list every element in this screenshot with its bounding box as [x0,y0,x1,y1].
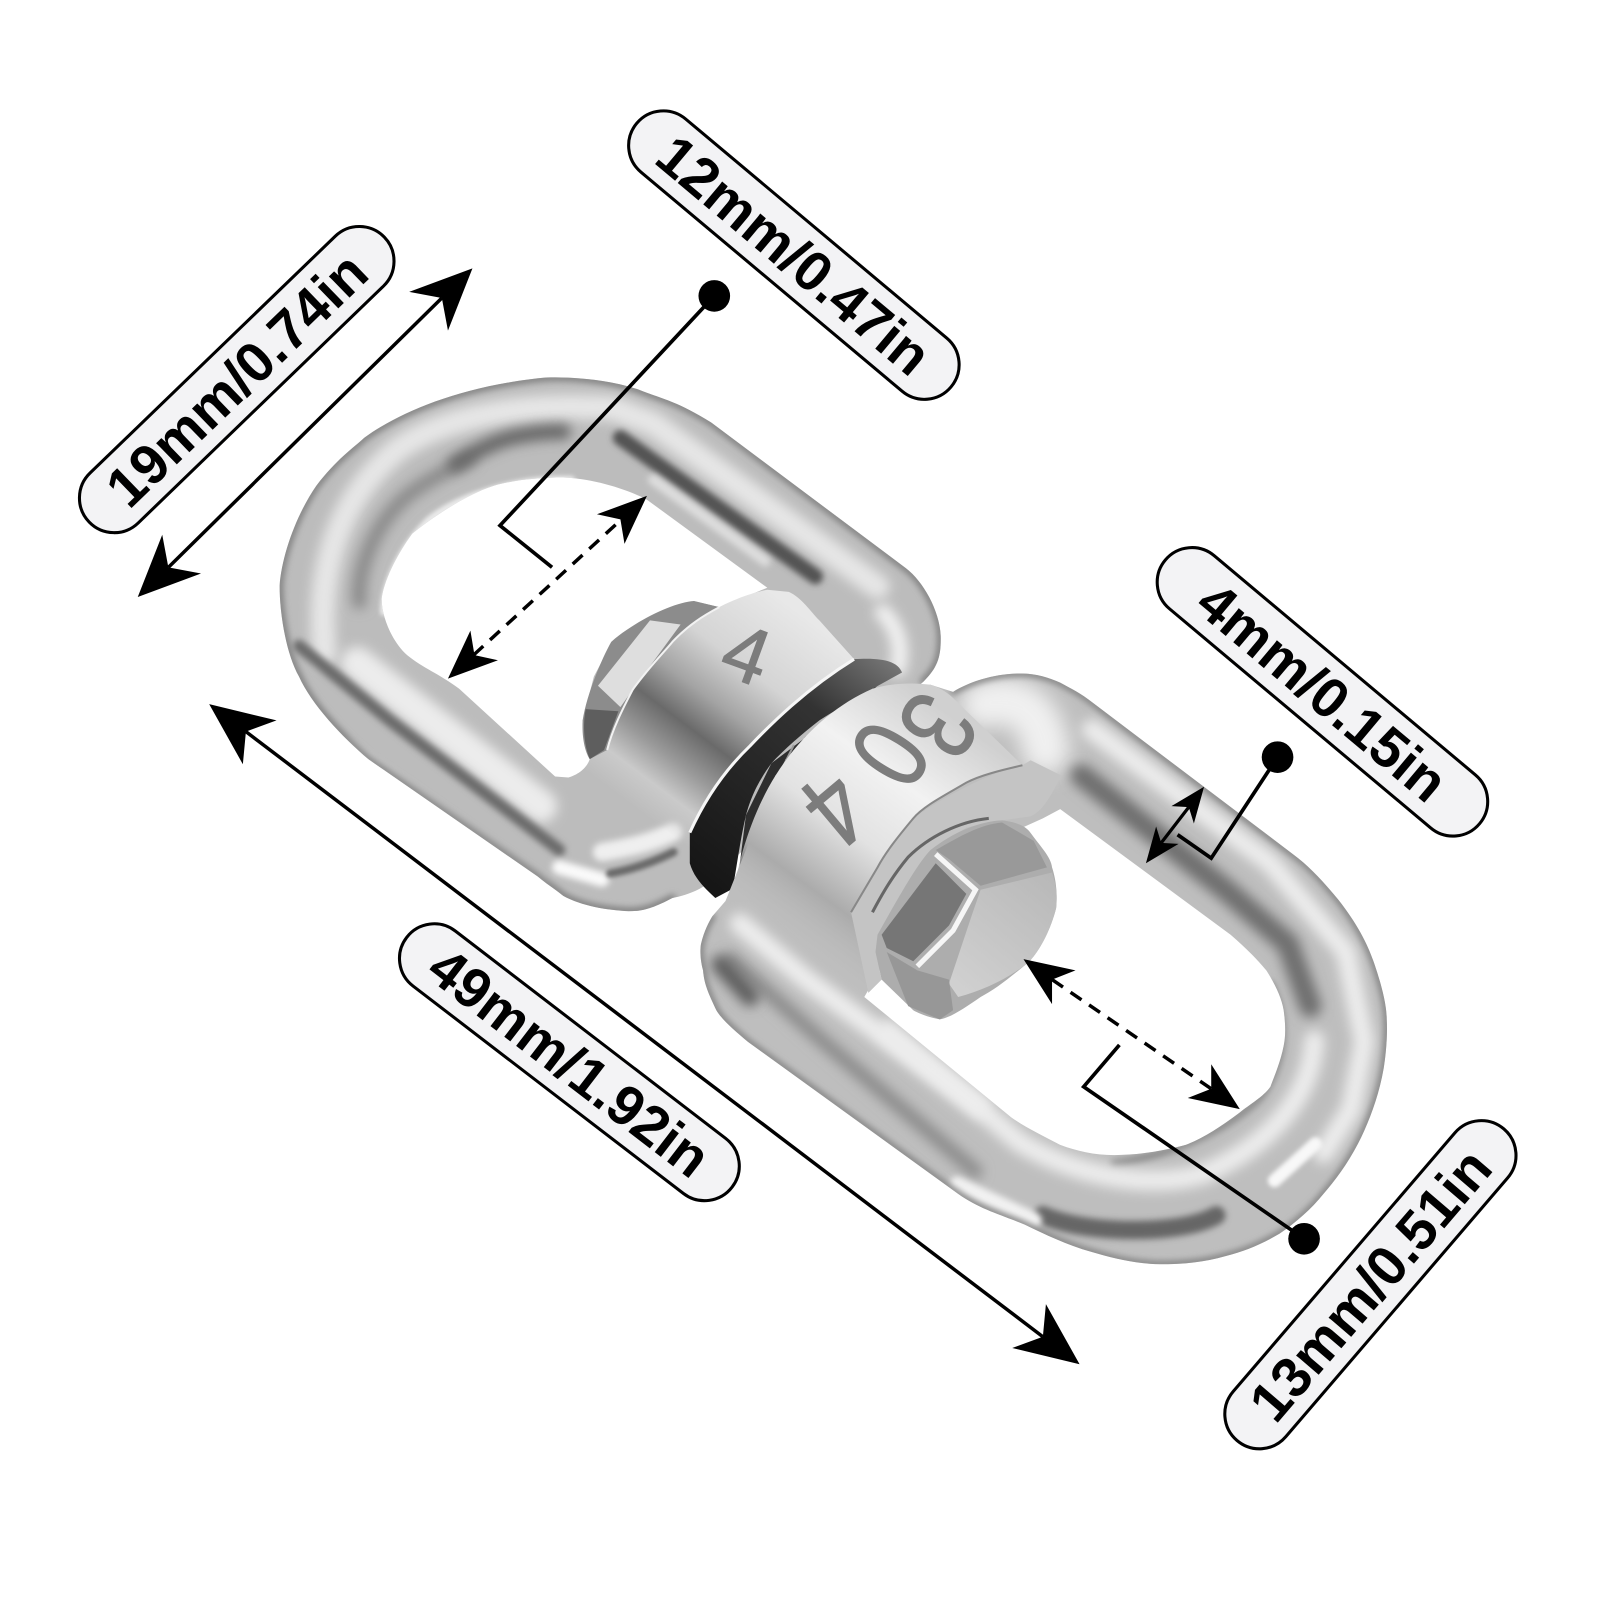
label: 4mm/0.15in: 4mm/0.15in [1185,569,1460,814]
dashed arrow: 13mm opening [1023,959,1240,1109]
swivel: upper ring [280,377,941,911]
stamp: 304: 0 [827,702,954,806]
dashed arrow: 12mm opening [448,496,647,679]
leader: 13mm [1084,1045,1320,1255]
lower nut [876,820,1057,1019]
arrow: 4mm thickness [1146,787,1204,863]
upper nut [582,601,719,759]
label: 13mm/0.51in [1211,1106,1530,1463]
label: 12mm/0.47in: 12mm/0.47in [645,123,943,387]
flat seat under lower nut [851,760,1061,993]
label: 13mm/0.51in: 13mm/0.51in [1237,1136,1504,1433]
label: 19mm/0.74in [65,212,408,547]
leader: 4mm [1178,741,1293,858]
arrow: 49mm overall length [209,704,1080,1364]
stamp: 304 [779,673,1002,870]
label: 19mm/0.74in: 19mm/0.74in [94,240,380,519]
stamp: 4: 4 [711,605,783,703]
label: 4mm/0.15in [1143,533,1502,850]
leader: 12mm [500,280,730,567]
upper collar [568,590,854,878]
label: 49mm/1.92in: 49mm/1.92in [417,935,722,1190]
stamp: 304: 4 [779,747,893,870]
label: 12mm/0.47in [614,97,973,414]
lower collar [735,673,1022,993]
stamp: 304: 3 [875,673,1002,778]
washer and thread [690,659,902,898]
arrow: 19mm overall width [138,268,472,597]
swivel: lower ring [700,673,1387,1264]
label: 49mm/1.92in [386,910,753,1215]
